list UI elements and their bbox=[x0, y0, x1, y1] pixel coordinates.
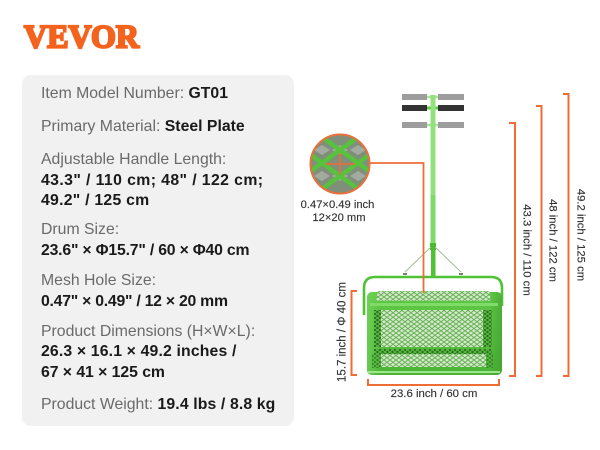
drum frame bbox=[364, 277, 502, 315]
mesh size label: 12×20 mm bbox=[312, 212, 366, 224]
mesh size label: 0.47×0.49 inch bbox=[301, 199, 374, 211]
spec: product dimensions: 67 × 41 × 125 cm bbox=[41, 364, 165, 380]
callout: mesh close-up bbox=[310, 134, 370, 194]
panel: specifications bbox=[22, 75, 294, 426]
dimension bracket: 43.3 inch bbox=[509, 123, 532, 376]
dimension bracket: 48 inch: 48 inch / 122 cm bbox=[546, 199, 558, 282]
leader line from close-up to drum bbox=[370, 163, 424, 293]
spec: product dimensions bbox=[41, 322, 255, 380]
handle assembly bbox=[402, 94, 464, 277]
dimension bracket: drum width: 23.6 inch / 60 cm bbox=[391, 388, 477, 400]
dimension bracket: 48 inch bbox=[536, 106, 558, 376]
spec: adjustable handle length: 43.3" / 110 cm; 48" / 122 cm; bbox=[41, 172, 263, 188]
spec: product weight: Product Weight: 19.4 lbs / 8.8 kg bbox=[41, 396, 275, 413]
spec: product dimensions: Product Dimensions (H×W×L): bbox=[41, 322, 255, 340]
product diagram bbox=[301, 93, 586, 398]
spec: mesh hole size bbox=[41, 272, 228, 310]
spec: item model number: Item Model Number: GT01 bbox=[41, 85, 228, 102]
spec: product dimensions: 26.3 × 16.1 × 49.2 inches / bbox=[41, 343, 237, 360]
spec: drum size: 23.6" × Φ15.7" / 60 × Φ40 cm bbox=[41, 242, 249, 258]
dimension bracket: 43.3 inch: 43.3 inch / 110 cm bbox=[520, 204, 532, 296]
spec: mesh hole size: 0.47" × 0.49" / 12 × 20 mm bbox=[41, 292, 228, 310]
dimension bracket: drum diameter bbox=[336, 282, 357, 382]
mesh drum bbox=[367, 291, 502, 375]
spec: adjustable handle length bbox=[41, 151, 263, 209]
dimension bracket: 49.2 inch bbox=[563, 94, 586, 376]
dimension bracket: drum width bbox=[368, 379, 499, 400]
spec: mesh hole size: Mesh Hole Size: bbox=[41, 272, 156, 289]
spec: primary material: Primary Material: Steel Plate bbox=[41, 118, 245, 135]
spec: adjustable handle length: 49.2" / 125 cm bbox=[41, 192, 149, 209]
spec: drum size: Drum Size: bbox=[41, 221, 119, 238]
dimension bracket: 49.2 inch: 49.2 inch / 125 cm bbox=[574, 189, 586, 281]
spec: drum size bbox=[41, 221, 249, 258]
dimension bracket: drum diameter: 15.7 inch / Φ 40 cm bbox=[336, 282, 348, 382]
spec: adjustable handle length: Adjustable Handle Length: bbox=[41, 151, 226, 168]
logo: VEVOR: VEVOR bbox=[24, 20, 140, 56]
